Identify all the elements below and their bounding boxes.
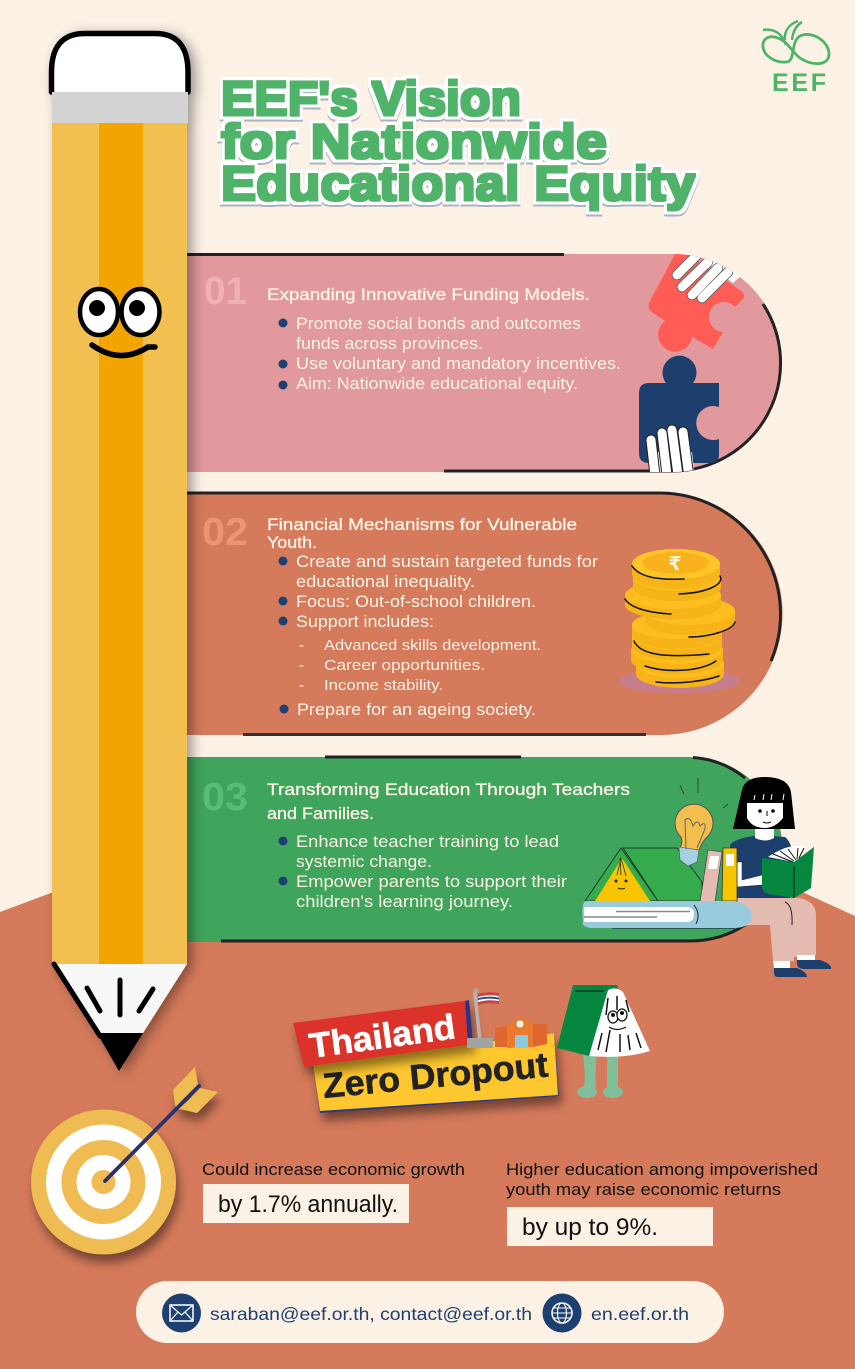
bullets 02: educational inequality. <box>296 573 475 591</box>
bullets 02: Support includes: <box>296 613 434 631</box>
title: for Nationwide <box>221 116 607 169</box>
bullets 02 <box>278 553 599 719</box>
neck & face <box>755 825 774 840</box>
arm <box>737 862 777 887</box>
pencil tip <box>53 964 187 1071</box>
bullets 02: Advanced skills development. <box>324 637 541 654</box>
number 01: 01 <box>204 270 247 313</box>
bullets 01: Aim: Nationwide educational equity. <box>296 375 578 393</box>
yellow banner <box>313 1033 559 1113</box>
pencil face <box>80 289 160 356</box>
green reading book <box>762 847 814 898</box>
bullets 03: Empower parents to support their <box>296 873 568 891</box>
icon: coin stack <box>618 549 740 693</box>
bullets 02: Focus: Out-of-school children. <box>296 593 536 611</box>
pencil body <box>52 123 187 964</box>
bullets 02: - <box>299 637 304 654</box>
torso <box>730 835 793 898</box>
number 03: 03 <box>202 776 248 819</box>
pencil <box>52 33 188 1071</box>
stat: economic returns <box>506 1161 818 1246</box>
panel: 03 teachers and families <box>187 757 782 942</box>
heading 03 <box>267 780 630 823</box>
badge: Thailand Zero Dropout: Thailand <box>307 1007 458 1066</box>
bullets 01: funds across provinces. <box>296 335 483 353</box>
title <box>221 73 695 211</box>
footer contact bar <box>136 1281 724 1343</box>
number 02: 02 <box>202 511 248 554</box>
bullets 02: Create and sustain targeted funds for <box>296 553 599 571</box>
logo: EEF: EEF <box>772 69 826 97</box>
bullets 01: Promote social bonds and outcomes <box>296 315 581 333</box>
heading 02 <box>267 515 577 552</box>
bullets 02: - <box>299 657 304 674</box>
bullets 02: - <box>299 677 304 694</box>
bullets 03 <box>278 833 568 911</box>
heading 03: Transforming Education Through Teachers <box>267 780 630 799</box>
bullets 03: systemic change. <box>296 853 432 871</box>
bullets 01: Use voluntary and mandatory incentives. <box>296 355 621 373</box>
book mascot <box>557 985 650 1098</box>
legs <box>735 898 816 961</box>
stat: economic returns: by up to 9%. <box>522 1214 658 1241</box>
stat: economic returns: Higher education among impoverished <box>506 1161 818 1179</box>
heading 03: and Families. <box>267 804 374 823</box>
badge: Thailand Zero Dropout <box>293 985 650 1113</box>
title: EEF's Vision <box>221 73 521 126</box>
icon: email <box>162 1294 201 1332</box>
bullets 01 <box>278 315 621 393</box>
flag and school <box>467 988 547 1048</box>
panel: 01 funding models <box>187 250 782 480</box>
bullets 03: children's learning journey. <box>296 893 513 911</box>
icon: globe <box>542 1294 582 1332</box>
illustration: girl reading on book <box>582 777 831 977</box>
heading 02: Youth. <box>267 533 317 552</box>
badge: Thailand Zero Dropout: Zero Dropout <box>321 1045 550 1106</box>
background hill <box>0 800 855 1369</box>
website text: en.eef.or.th <box>591 1304 689 1324</box>
heading 01: Expanding Innovative Funding Models. <box>267 285 590 304</box>
book base <box>582 901 752 928</box>
bullets 02: Prepare for an ageing society. <box>297 701 536 719</box>
title: Educational Equity <box>221 158 695 211</box>
stat: economic growth <box>202 1161 465 1223</box>
icon: target with arrow <box>31 1067 218 1254</box>
panel: 02 financial mechanisms <box>187 492 782 735</box>
lightbulb <box>675 778 728 866</box>
standing books <box>700 850 722 902</box>
open book tent <box>623 848 702 901</box>
stat: economic growth: Could increase economic growth <box>202 1161 465 1179</box>
logo: EEF <box>763 21 829 97</box>
red banner <box>293 1000 473 1067</box>
pencil ferrule <box>52 92 188 124</box>
stat: economic growth: by 1.7% annually. <box>218 1191 398 1218</box>
bullets 02: Career opportunities. <box>324 657 485 674</box>
bullets 02: Income stability. <box>324 677 443 694</box>
bullets 03: Enhance teacher training to lead <box>296 833 559 851</box>
icon: puzzle hands <box>639 250 745 480</box>
email text: saraban@eef.or.th, contact@eef.or.th <box>210 1304 532 1324</box>
icon: coin stack: ₹ <box>668 553 682 575</box>
stat: economic returns: youth may raise economic returns <box>506 1181 781 1199</box>
heading 02: Financial Mechanisms for Vulnerable <box>267 515 577 534</box>
pencil eraser <box>52 33 188 92</box>
